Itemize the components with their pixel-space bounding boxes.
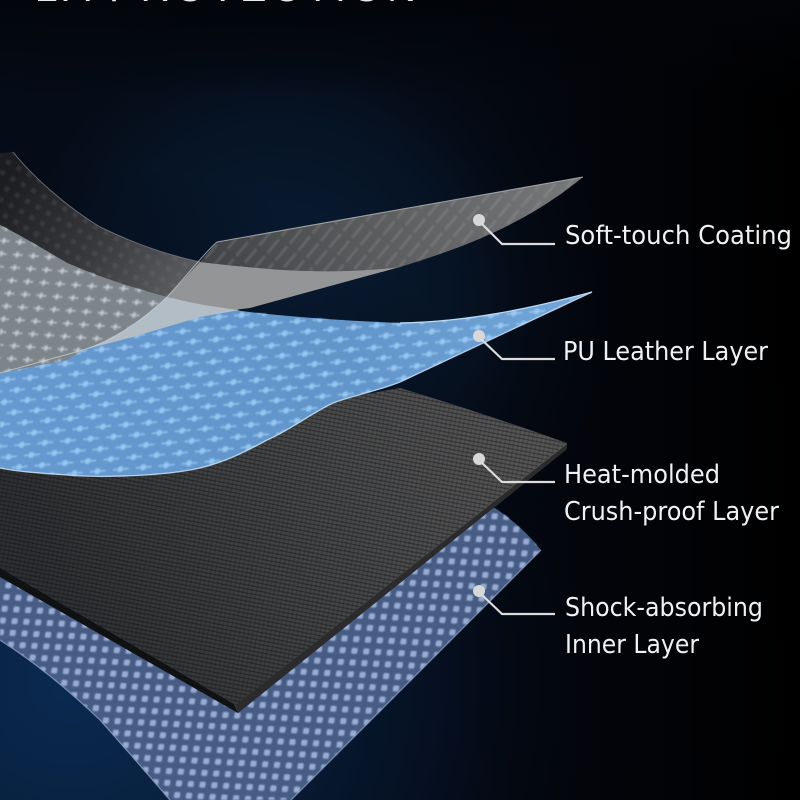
- coating: overlap over blue at left: [0, 225, 217, 373]
- callout: Heat-molded Crush-proof Layer: Heat-molded: [564, 460, 720, 490]
- coating: upper right band: [200, 177, 583, 271]
- callout: PU Leather Layer: PU Leather Layer: [563, 337, 768, 367]
- callout: Heat-molded Crush-proof Layer: Crush-proof Layer: [564, 497, 779, 527]
- layer: PU leather layer: [0, 225, 592, 476]
- callout: Shock-absorbing Inner Layer: Inner Layer: [565, 630, 699, 660]
- coating: light fold over dark: [167, 262, 400, 310]
- layer: soft-touch coating: [0, 152, 583, 373]
- coating: dark back section: [0, 152, 200, 297]
- coating: light fold over blue: [83, 297, 240, 350]
- callout: Heat-molded Crush-proof Layer: [473, 453, 779, 527]
- layer: heat-molded crush-proof layer: [0, 388, 567, 713]
- callout: PU Leather Layer: [473, 330, 768, 367]
- callout: Shock-absorbing Inner Layer: Shock-absorbing: [565, 593, 763, 623]
- callout: Shock-absorbing Inner Layer: [473, 585, 763, 660]
- layer: shock-absorbing inner layer: [0, 508, 541, 800]
- callout: Soft-touch Coating: [473, 214, 792, 251]
